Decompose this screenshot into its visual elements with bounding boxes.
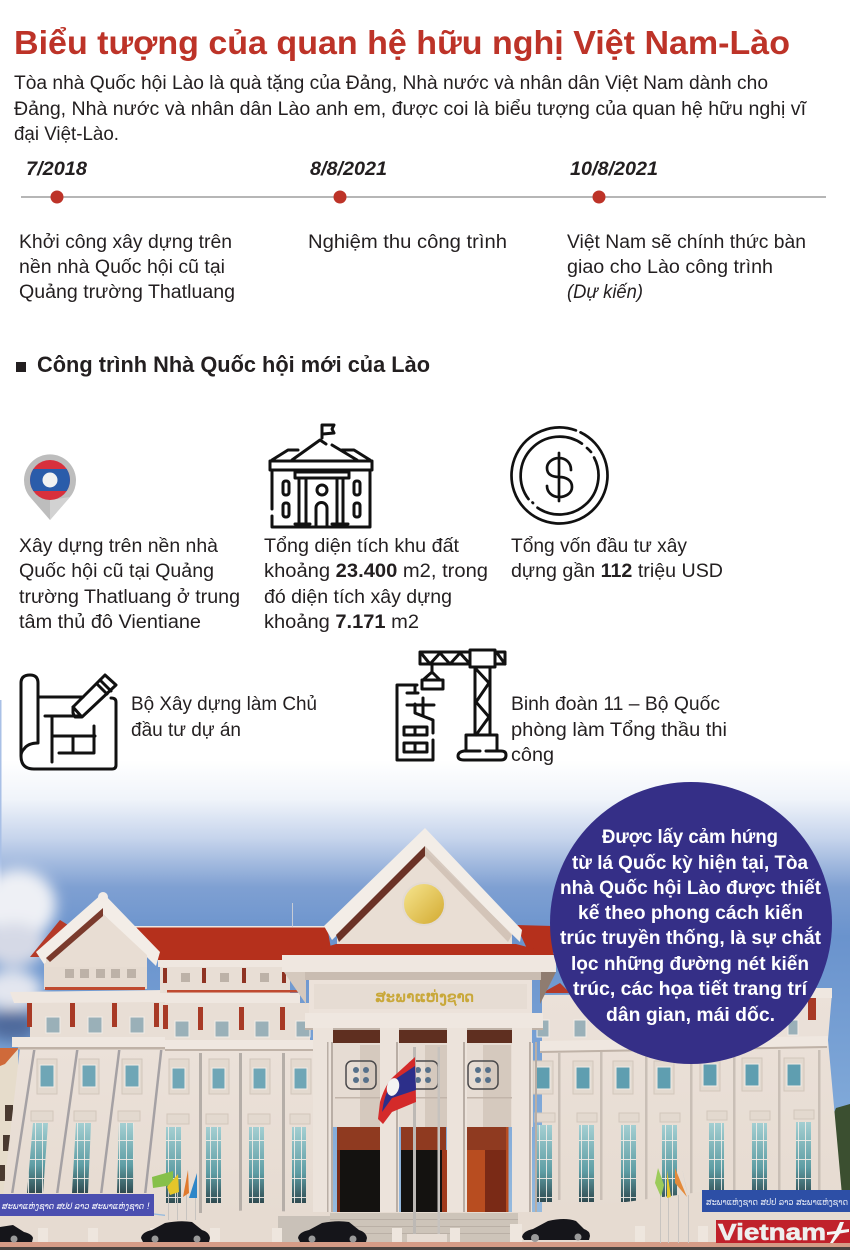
left wing bbox=[3, 953, 168, 1215]
intro paragraph: Đảng, Nhà nước và nhân dân Lào anh em, được coi là biểu tượng của quan hệ hữu nghị vĩ bbox=[14, 99, 807, 120]
icon: tower crane bbox=[397, 650, 506, 760]
text: site area: Tổng diện tích khu đất bbox=[264, 536, 460, 557]
left gable bbox=[30, 892, 160, 978]
text: site area bbox=[264, 536, 488, 633]
clouds bbox=[0, 869, 56, 1041]
text: site area: khoảng 7.171 m2 bbox=[264, 612, 419, 633]
timeline item: 10/8/2021 bbox=[567, 159, 806, 303]
timeline item: 10/8/2021: 10/8/2021 bbox=[570, 159, 658, 180]
intro paragraph: Tòa nhà Quốc hội Lào là quà tặng của Đảng, Nhà nước và nhân dân Việt Nam dành cho bbox=[14, 73, 768, 94]
cars bbox=[0, 1219, 590, 1242]
text: location: Xây dựng trên nền nhà bbox=[19, 536, 218, 557]
text: contractor: công bbox=[511, 745, 554, 766]
callout circle: dân gian, mái dốc. bbox=[606, 1005, 775, 1026]
callout circle: trúc, các họa tiết trang trí bbox=[573, 979, 808, 1000]
logo: Vietnam+ bbox=[716, 1219, 850, 1245]
timeline item: 10/8/2021: (Dự kiến) bbox=[567, 282, 643, 303]
text: contractor: Binh đoàn 11 – Bộ Quốc bbox=[511, 694, 720, 715]
icon: dollar coin bbox=[495, 411, 624, 540]
emblem bbox=[403, 883, 445, 925]
flagpoles and Lao flag bbox=[378, 1047, 440, 1234]
callout circle bbox=[550, 782, 832, 1064]
callout circle: nhà Quốc hội Lào được thiết bbox=[560, 878, 822, 899]
text: investor bbox=[131, 694, 317, 741]
text: investment: Tổng vốn đầu tư xây bbox=[511, 536, 687, 557]
sky bbox=[0, 760, 850, 1250]
right banner bbox=[702, 1190, 850, 1212]
entrance doors bbox=[337, 1127, 508, 1213]
text: investor: Bộ Xây dựng làm Chủ bbox=[131, 694, 317, 715]
timeline item: 10/8/2021: giao cho Lào công trình bbox=[567, 257, 773, 278]
side building at left bbox=[0, 1048, 18, 1198]
text: location: Quốc hội cũ tại Quảng bbox=[19, 561, 214, 582]
title: Biểu tượng của quan hệ hữu nghị Việt Nam-Lào bbox=[14, 24, 790, 61]
left banner bbox=[0, 1194, 154, 1216]
timeline item: 10/8/2021: Việt Nam sẽ chính thức bàn bbox=[567, 232, 806, 253]
illustration: sky and building photo bbox=[0, 700, 850, 1250]
text: location: tâm thủ đô Vientiane bbox=[19, 612, 201, 633]
text: investment bbox=[511, 536, 723, 582]
callout circle: Được lấy cảm hứng bbox=[602, 827, 778, 848]
text: contractor bbox=[511, 694, 727, 766]
text: investment: dựng gần 112 triệu USD bbox=[511, 561, 723, 582]
intro paragraph: đại Việt-Lào. bbox=[14, 124, 119, 145]
base and stairs bbox=[0, 1190, 850, 1250]
text: site area: khoảng 23.400 m2, trong bbox=[264, 561, 488, 582]
logo: Vietnam+: Vietnam bbox=[718, 1219, 826, 1245]
columns bbox=[313, 1028, 532, 1213]
text: location bbox=[19, 536, 240, 633]
text: site area: đó diện tích xây dựng bbox=[264, 587, 452, 608]
icon: blueprint and pencil bbox=[21, 675, 116, 769]
tree bbox=[829, 1104, 850, 1195]
central gable with emblem bbox=[300, 828, 558, 955]
ornamental windows bbox=[346, 1061, 498, 1089]
timeline item: 7/2018: nền nhà Quốc hội cũ tại bbox=[19, 257, 225, 278]
timeline item: 8/8/2021: 8/8/2021 bbox=[310, 159, 387, 180]
timeline item: 7/2018: 7/2018 bbox=[26, 159, 87, 180]
icon: parliament building bbox=[270, 425, 372, 527]
callout circle: trúc truyền thống, là sự chắt bbox=[560, 927, 822, 949]
right small flags bbox=[655, 1168, 689, 1243]
timeline bbox=[19, 159, 826, 303]
timeline item: 7/2018 bbox=[19, 159, 235, 303]
timeline item: 7/2018: Khởi công xây dựng trên bbox=[19, 232, 232, 253]
callout circle: lọc những đường nét kiến bbox=[571, 954, 809, 975]
callout circle: kế theo phong cách kiến bbox=[578, 903, 803, 924]
central portico bbox=[282, 955, 556, 1213]
text: contractor: phòng làm Tổng thầu thi bbox=[511, 720, 727, 741]
icon: location pin with Lao flag bbox=[24, 454, 76, 520]
left small flags bbox=[152, 1170, 197, 1220]
timeline item: 8/8/2021: Nghiệm thu công trình bbox=[308, 232, 507, 253]
callout circle: từ lá Quốc kỳ hiện tại, Tòa bbox=[572, 853, 808, 874]
building sign: ສະພາແຫ່ງຊາດ bbox=[375, 988, 474, 1007]
text: location: trường Thatluang ở trung bbox=[19, 587, 240, 608]
left banner: ສະພາແຫ່ງຊາດ ສປປ ລາວ ສະພາແຫ່ງຊາດ ! bbox=[1, 1201, 150, 1212]
timeline item: 7/2018: Quảng trường Thatluang bbox=[19, 282, 235, 303]
intro paragraph bbox=[14, 73, 807, 145]
section heading: Công trình Nhà Quốc hội mới của Lào bbox=[37, 352, 430, 377]
text: investor: đầu tư dự án bbox=[131, 720, 241, 741]
right wing bbox=[533, 983, 842, 1215]
middle section bbox=[133, 903, 333, 1217]
timeline item: 8/8/2021 bbox=[308, 159, 507, 253]
